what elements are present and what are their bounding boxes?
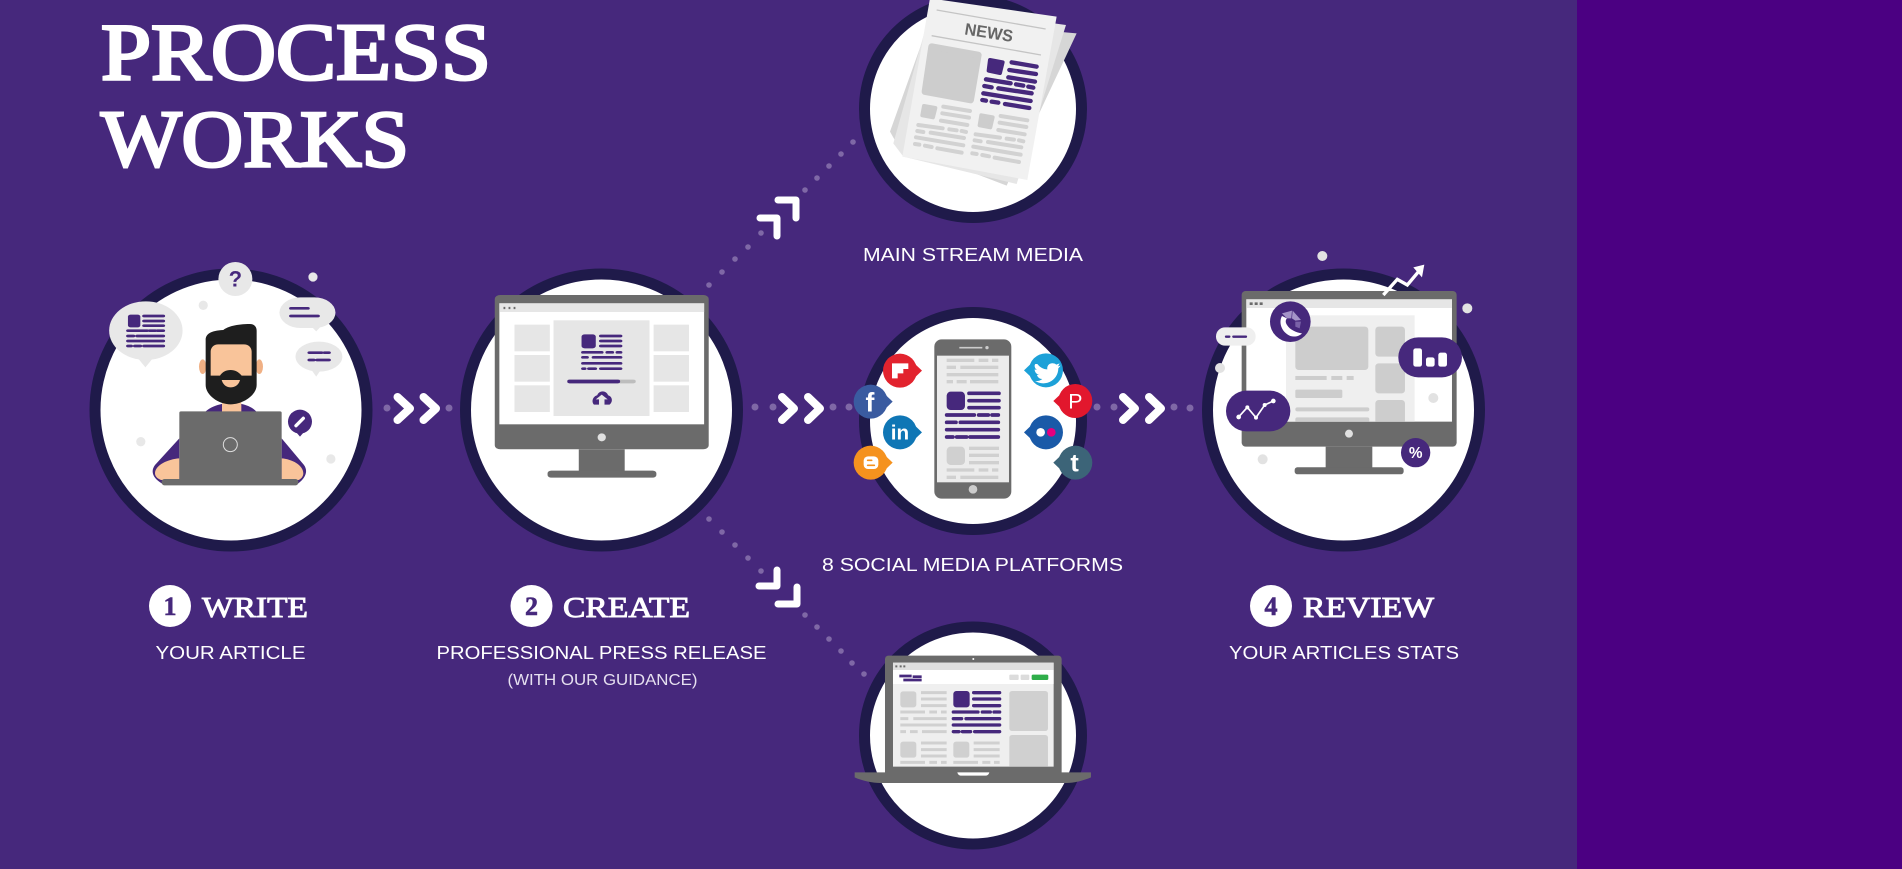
- illustration: writer at laptop: [153, 324, 312, 485]
- icon: tumblr: [1053, 446, 1092, 480]
- illustration: monitor: [495, 295, 709, 478]
- icon: facebook: [854, 385, 893, 419]
- icon: flipboard: [883, 354, 922, 388]
- icon: pinterest: [1053, 384, 1092, 418]
- progress bar: [567, 380, 636, 383]
- caption: YOUR ARTICLE: [156, 642, 306, 663]
- stand: [598, 433, 606, 441]
- circle: [864, 0, 1082, 218]
- panel: website on laptop: [855, 627, 1091, 844]
- bar chart pill: [1398, 337, 1462, 377]
- heading: CREATE: [563, 592, 690, 624]
- arrow: create to social: [782, 397, 820, 420]
- panel: step 4 review: [1208, 251, 1480, 663]
- number: 1: [164, 592, 176, 621]
- connector dots: [384, 139, 1194, 677]
- circle: [864, 627, 1082, 844]
- arrow: write to create: [398, 397, 436, 420]
- small pill: [1216, 327, 1256, 346]
- face: [211, 344, 252, 376]
- panel: step 1 write: [95, 262, 367, 663]
- icon: linkedin: in: [891, 422, 909, 445]
- icon: blogger: [854, 446, 893, 480]
- caption: MAIN STREAM MEDIA: [863, 244, 1084, 265]
- pen bubble: [288, 410, 312, 434]
- arrow: social to review: [1123, 397, 1161, 420]
- panel: main stream media: [863, 0, 1084, 265]
- percent badge: [1401, 438, 1430, 467]
- circle: [466, 274, 738, 546]
- caption: 8 SOCIAL MEDIA PLATFORMS: [822, 554, 1123, 575]
- right band: [1577, 0, 1902, 869]
- title: PROCESS: [101, 9, 491, 97]
- icon: twitter: [1024, 353, 1063, 387]
- growth arrow: [1383, 271, 1419, 295]
- heading: WRITE: [202, 592, 308, 624]
- illustration: speech bubbles: ?: [229, 267, 242, 292]
- panel: social media platforms: [822, 312, 1123, 575]
- circle: [95, 274, 367, 546]
- laptop: [179, 411, 282, 483]
- icon: linkedin: [883, 415, 922, 449]
- number badge: [149, 585, 191, 627]
- number badge: [1250, 585, 1292, 627]
- arrow: up to main stream media: [760, 200, 796, 236]
- heading: REVIEW: [1303, 592, 1435, 624]
- icon: flickr: [1024, 415, 1063, 449]
- title: [101, 9, 491, 184]
- panel: step 2 create: [436, 274, 766, 689]
- icon: pinterest: P: [1068, 390, 1082, 414]
- illustration: phone and social icons: [854, 339, 1092, 499]
- illustration: analytics monitor: [1215, 251, 1472, 474]
- arrow: down to website: [759, 570, 797, 604]
- caption: PROFESSIONAL PRESS RELEASE: [436, 642, 766, 663]
- arrow head: [1413, 265, 1424, 277]
- circle: [1208, 274, 1480, 546]
- icon: tumblr: t: [1070, 449, 1079, 477]
- arms: [153, 438, 306, 483]
- collar: [205, 404, 257, 412]
- percent badge: %: [1409, 445, 1423, 462]
- icon: facebook: f: [866, 387, 875, 417]
- line chart pill: [1226, 391, 1290, 431]
- hair and beard: [206, 324, 257, 404]
- illustration: newspaper: NEWS: [963, 20, 1014, 46]
- illustration: newspaper: [890, 0, 1077, 186]
- decorative dots: [1215, 251, 1472, 464]
- mouth: [222, 380, 240, 387]
- title: WORKS: [101, 96, 409, 184]
- number badge: [510, 585, 552, 627]
- illustration: speech bubbles: [109, 262, 342, 464]
- circle: [864, 312, 1082, 530]
- guidance note: (WITH OUR GUIDANCE): [508, 672, 698, 689]
- number: 2: [525, 592, 538, 621]
- upload icon: [593, 391, 612, 405]
- number: 4: [1264, 592, 1278, 621]
- document icon: [582, 334, 596, 348]
- ears: [199, 359, 206, 374]
- illustration: laptop: [855, 656, 1091, 783]
- pie badge: [1270, 301, 1311, 342]
- caption: YOUR ARTICLES STATS: [1229, 642, 1459, 663]
